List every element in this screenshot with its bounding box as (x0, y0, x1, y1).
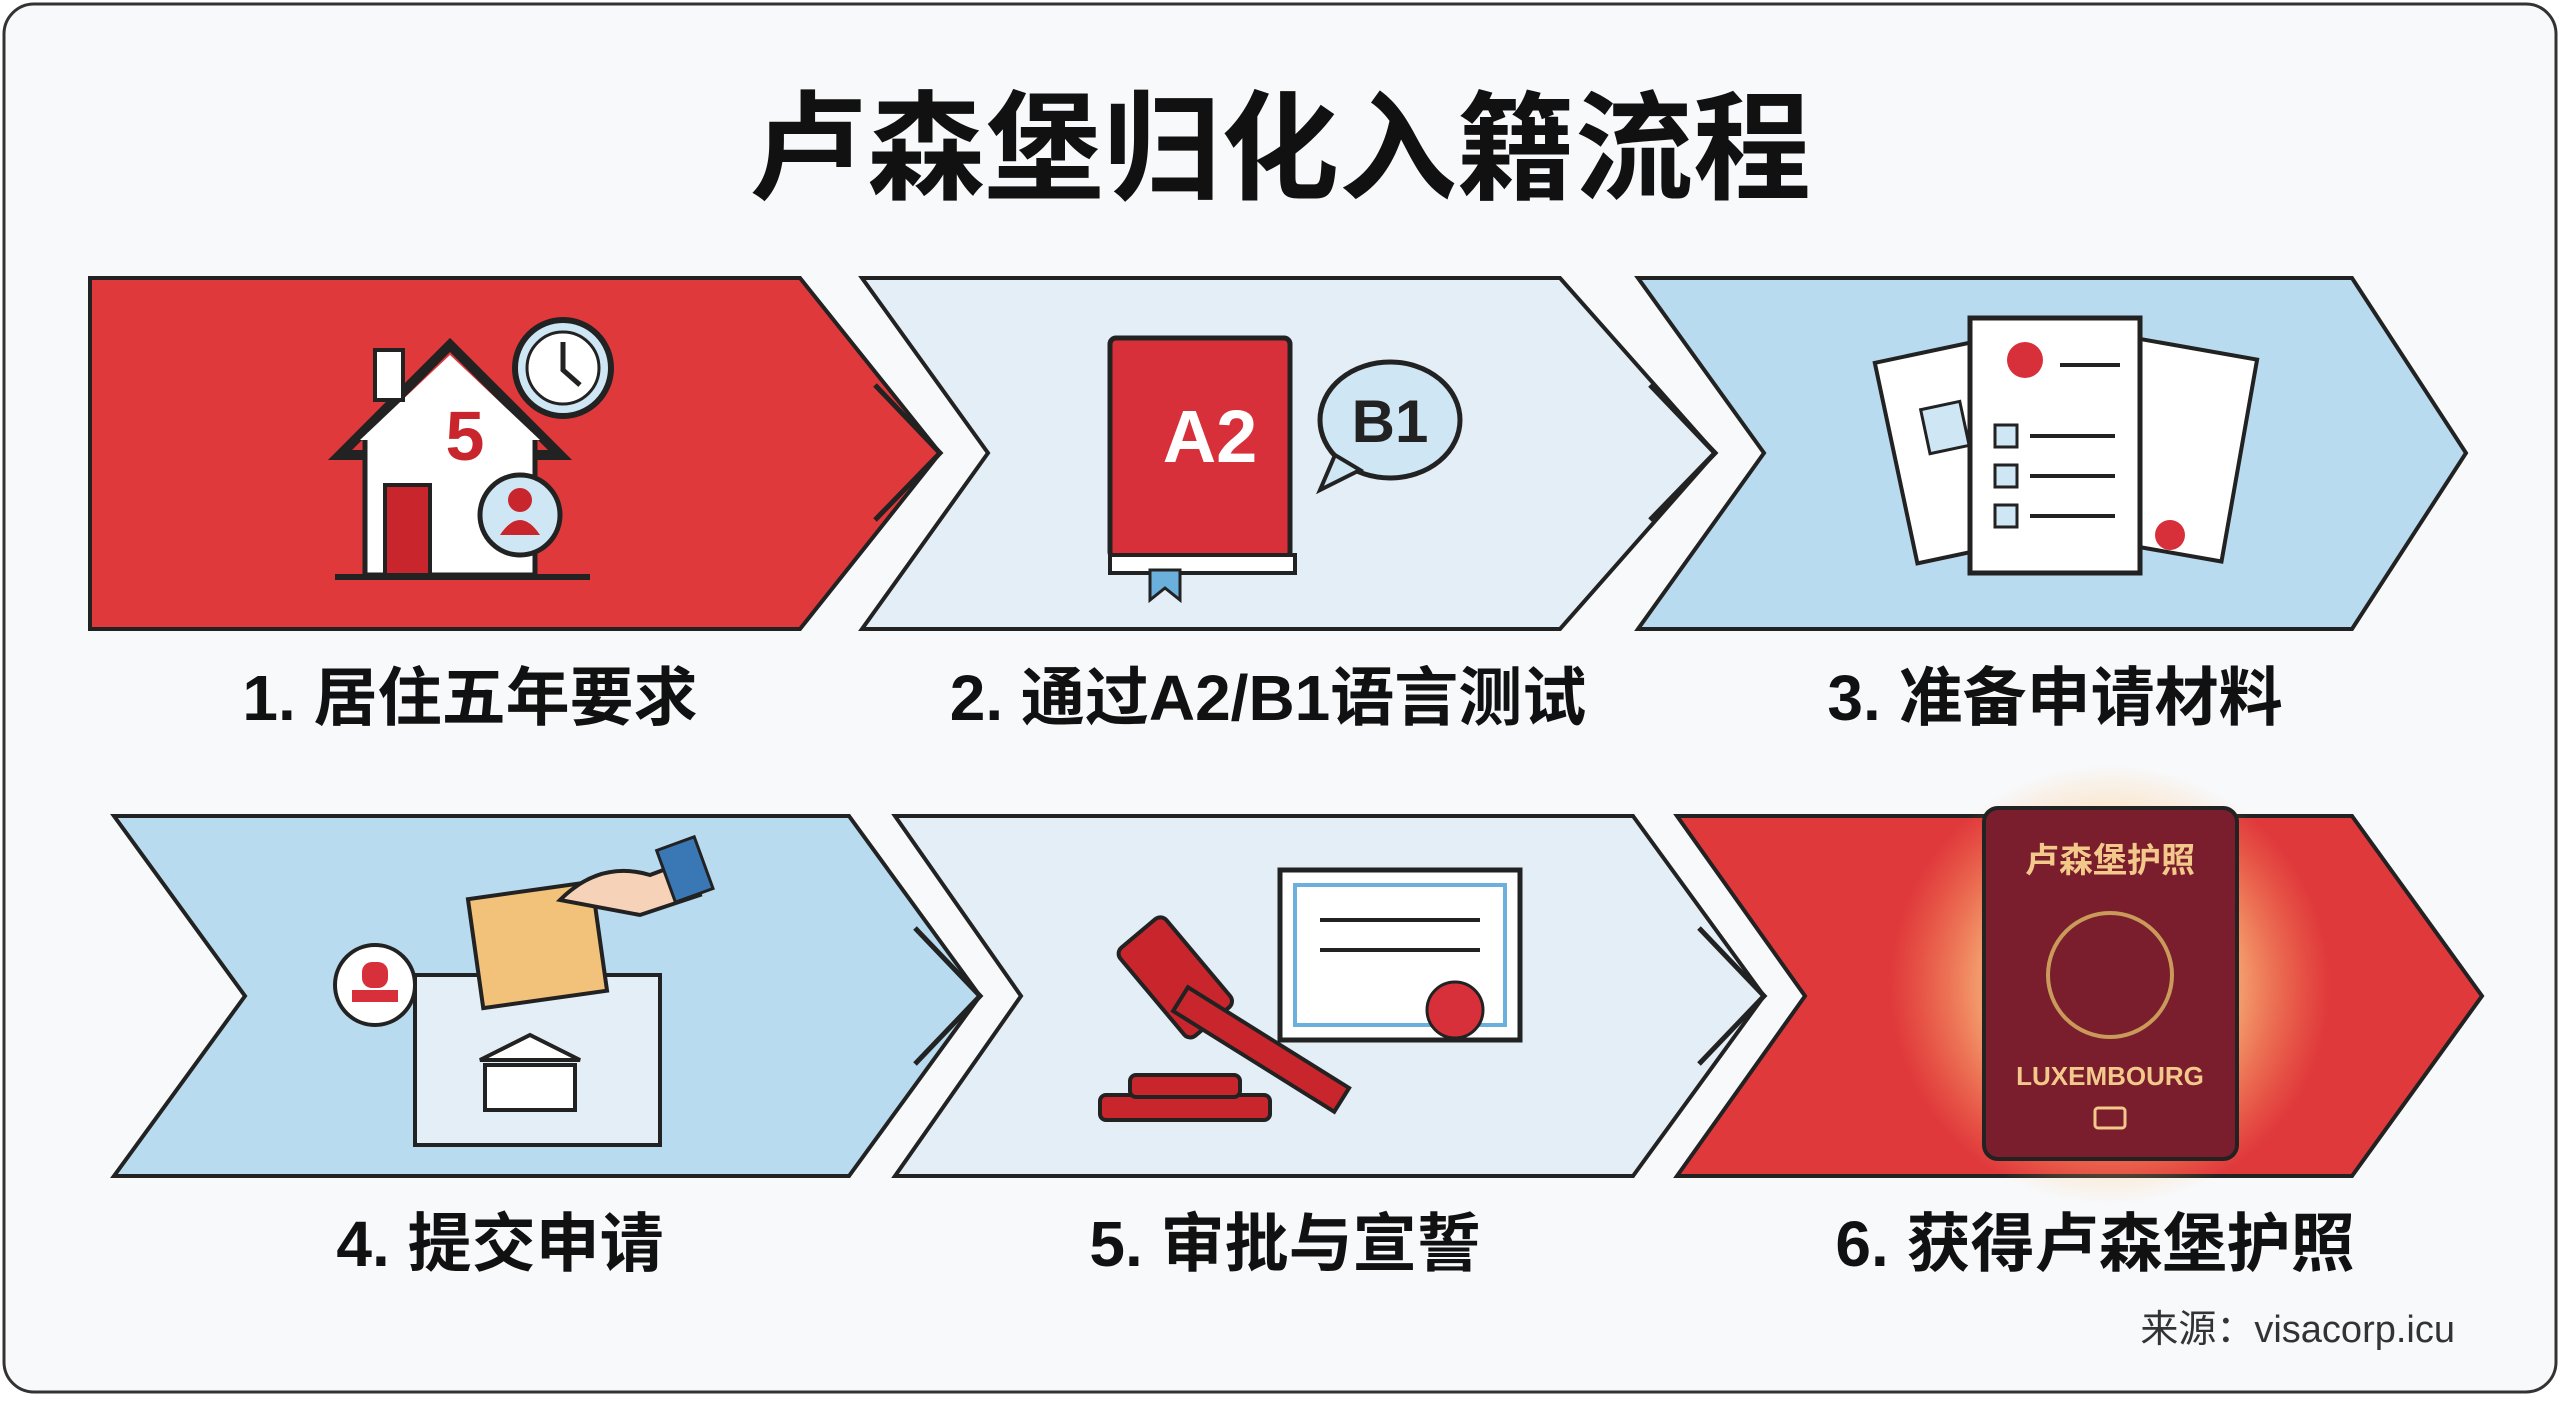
arrow mark 1 (875, 385, 940, 520)
chevron 3 (1638, 278, 2466, 629)
label 1: 1. 居住五年要求 (242, 662, 698, 734)
icon: passport with glow: LUXEMBOURG (2016, 1061, 2204, 1091)
icon: gavel and certificate (1100, 870, 1520, 1120)
arrow mark 4 (915, 928, 980, 1064)
icon: A2 book and B1 bubble: B1 (1352, 388, 1428, 455)
label 2: 2. 通过A2/B1语言测试 (950, 662, 1586, 734)
icon: passport with glow: 卢森堡护照 (2025, 842, 2195, 880)
label 3: 3. 准备申请材料 (1827, 662, 2283, 734)
label 5: 5. 审批与宣誓 (1089, 1208, 1481, 1280)
title: 卢森堡归化入籍流程 (749, 84, 1811, 216)
icon: house with 5 and clock (335, 320, 611, 577)
chevron 1 (90, 278, 940, 629)
label 4: 4. 提交申请 (336, 1208, 664, 1280)
icon: passport with glow (1890, 765, 2330, 1205)
arrow mark 5 (1699, 928, 1764, 1064)
icon: house with 5 and clock: 5 (446, 397, 484, 475)
chevron 4 (114, 816, 980, 1176)
chevron 6 (1677, 765, 2482, 1205)
chevron 2 (862, 278, 1715, 629)
arrow mark 2 (1650, 385, 1715, 520)
chevron 5 (895, 816, 1764, 1176)
label 6: 6. 获得卢森堡护照 (1835, 1208, 2355, 1280)
icon: A2 book and B1 bubble (1110, 338, 1460, 600)
source: 来源：visacorp.icu (2140, 1309, 2455, 1351)
icon: ballot box with folder (335, 837, 713, 1145)
icon: A2 book and B1 bubble: A2 (1163, 395, 1257, 478)
icon: documents (1875, 318, 2257, 573)
